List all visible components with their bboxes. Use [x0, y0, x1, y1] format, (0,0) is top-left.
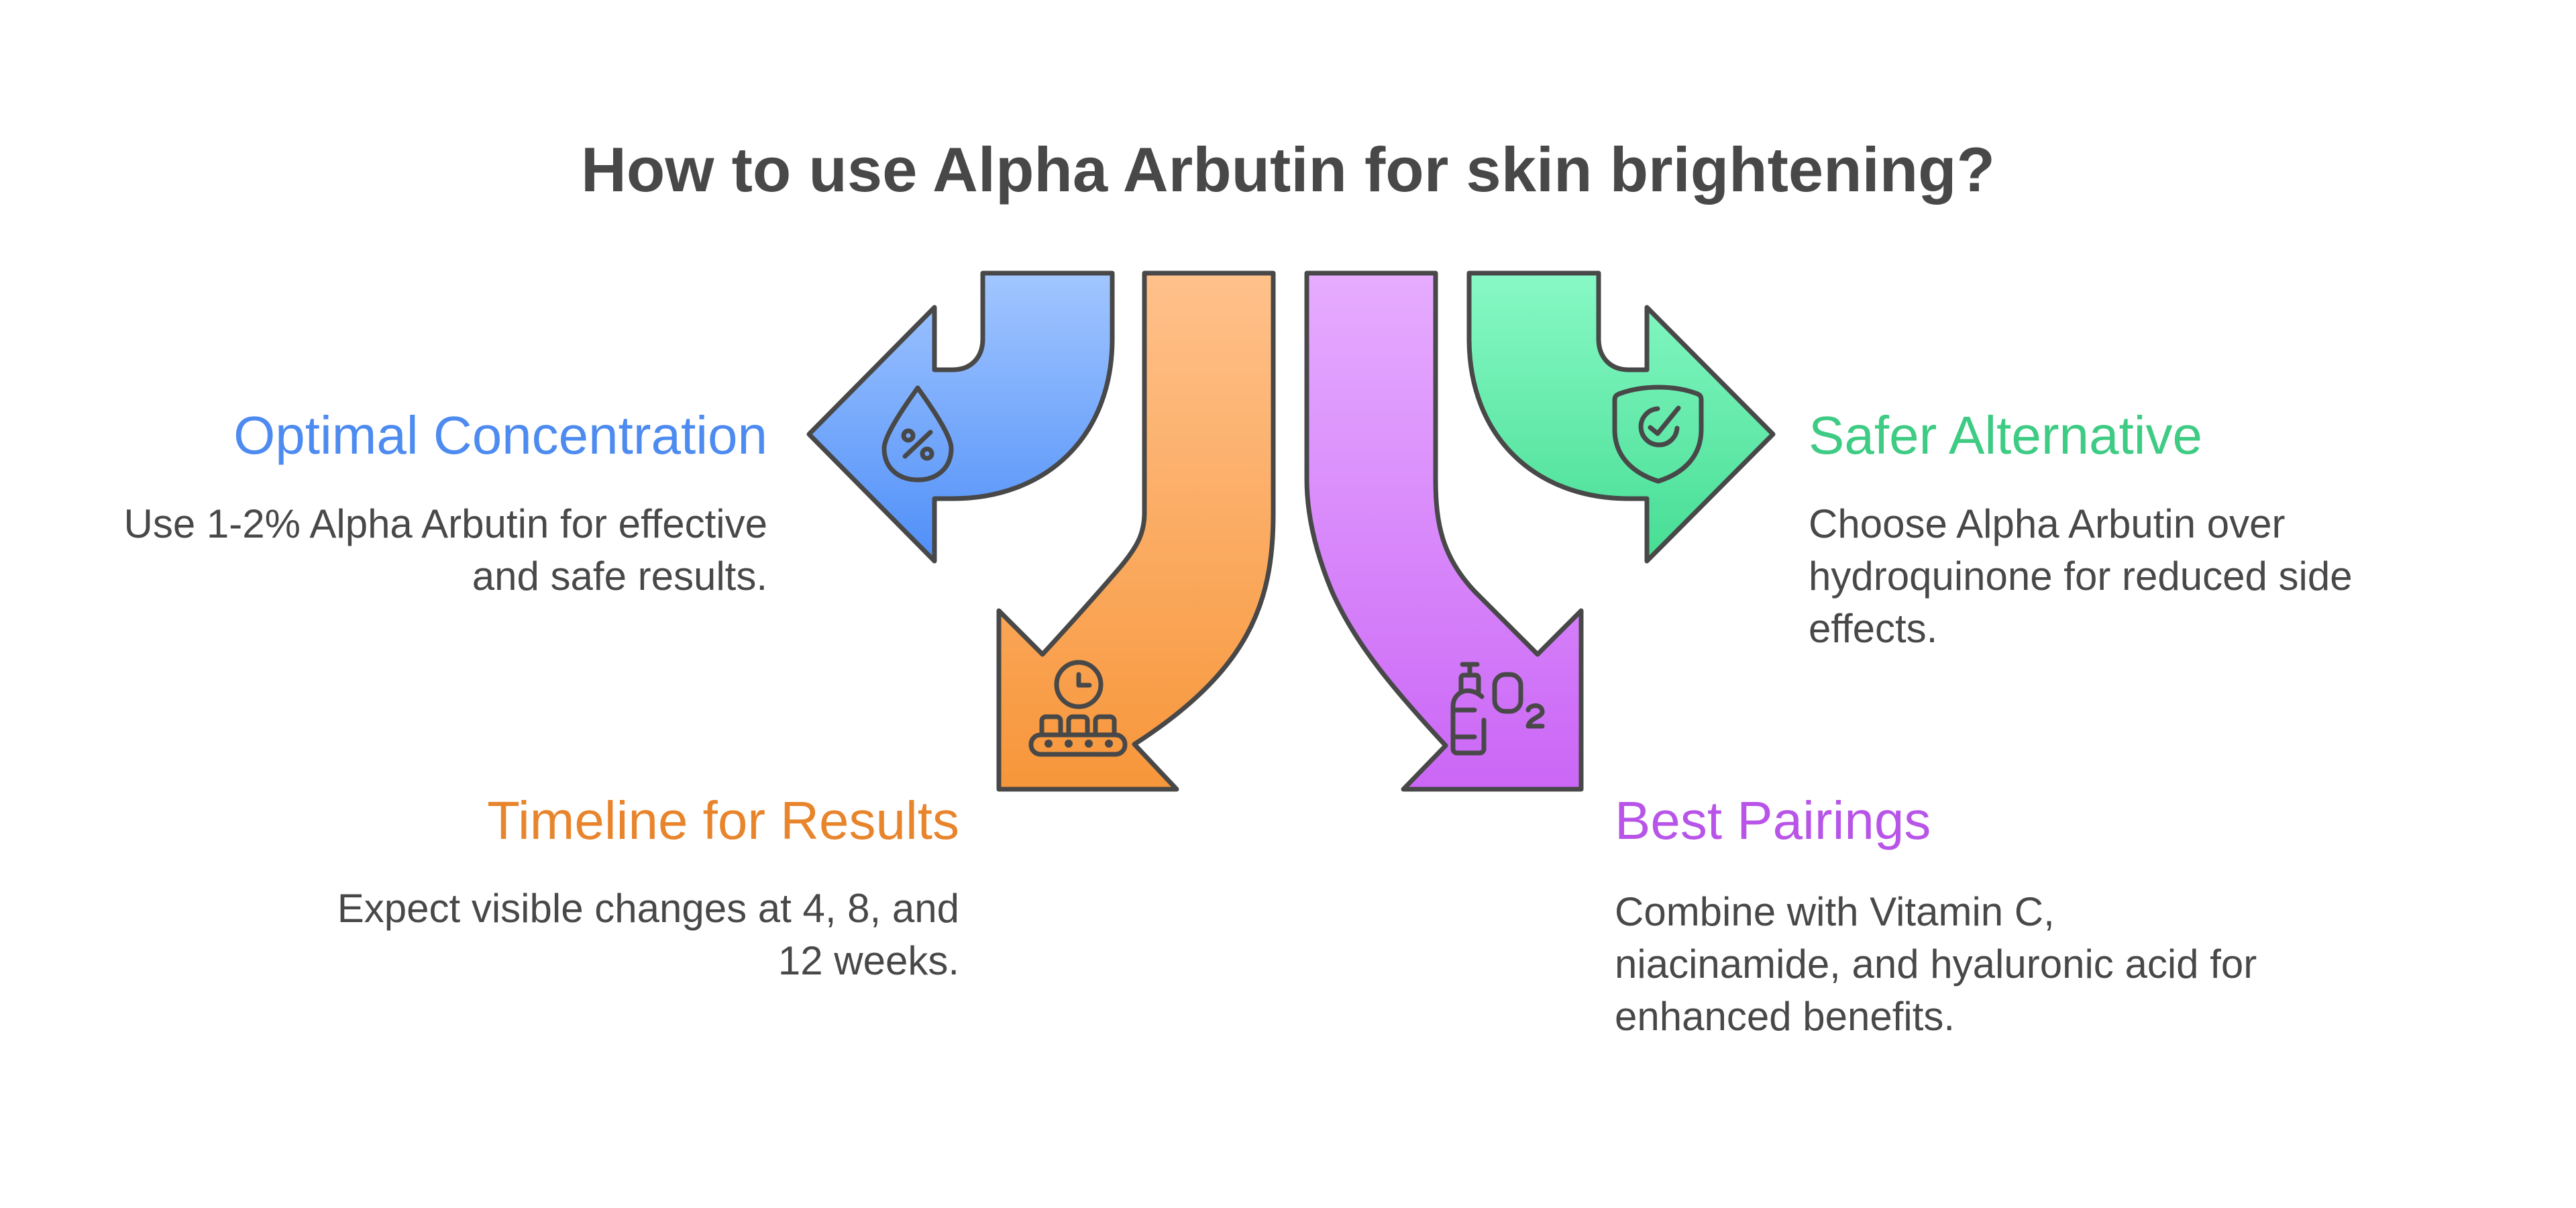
icon: drop with percent — [884, 388, 951, 480]
text: optimal concentration: and safe results. — [472, 554, 767, 599]
icon: shield with check — [1615, 387, 1701, 481]
text: optimal concentration: Use 1-2% Alpha Arbutin for effective — [124, 501, 767, 546]
heading: timeline for results: Timeline for Results — [487, 791, 959, 850]
icon: oxygen bottle — [1453, 664, 1542, 753]
text: safer alternative: effects. — [1809, 606, 1937, 651]
icon: clock and conveyor — [1031, 662, 1125, 754]
title: How to use Alpha Arbutin for skin brightening? — [581, 134, 1995, 205]
heading: optimal concentration: Optimal Concentration — [233, 405, 767, 465]
text: timeline for results: Expect visible changes at 4, 8, and — [337, 886, 959, 931]
text: safer alternative: Choose Alpha Arbutin over — [1809, 501, 2285, 546]
text: best pairings: enhanced benefits. — [1615, 994, 1955, 1039]
text: safer alternative — [1809, 501, 2353, 651]
text: timeline for results — [337, 886, 959, 983]
arrow: orange timeline — [999, 273, 1273, 789]
text: best pairings: niacinamide, and hyaluronic acid for — [1615, 942, 2257, 987]
heading: safer alternative: Safer Alternative — [1809, 405, 2202, 465]
arrow: green safer alternative — [1469, 273, 1773, 561]
text: safer alternative: hydroquinone for reduced side — [1809, 554, 2353, 599]
text: timeline for results: 12 weeks. — [778, 938, 959, 983]
text: best pairings — [1615, 889, 2257, 1039]
arrow: blue optimal concentration — [809, 273, 1112, 561]
text: optimal concentration — [124, 501, 767, 599]
text: best pairings: Combine with Vitamin C, — [1615, 889, 2055, 934]
heading: best pairings: Best Pairings — [1615, 791, 1931, 850]
arrow: purple best pairings — [1307, 273, 1581, 789]
